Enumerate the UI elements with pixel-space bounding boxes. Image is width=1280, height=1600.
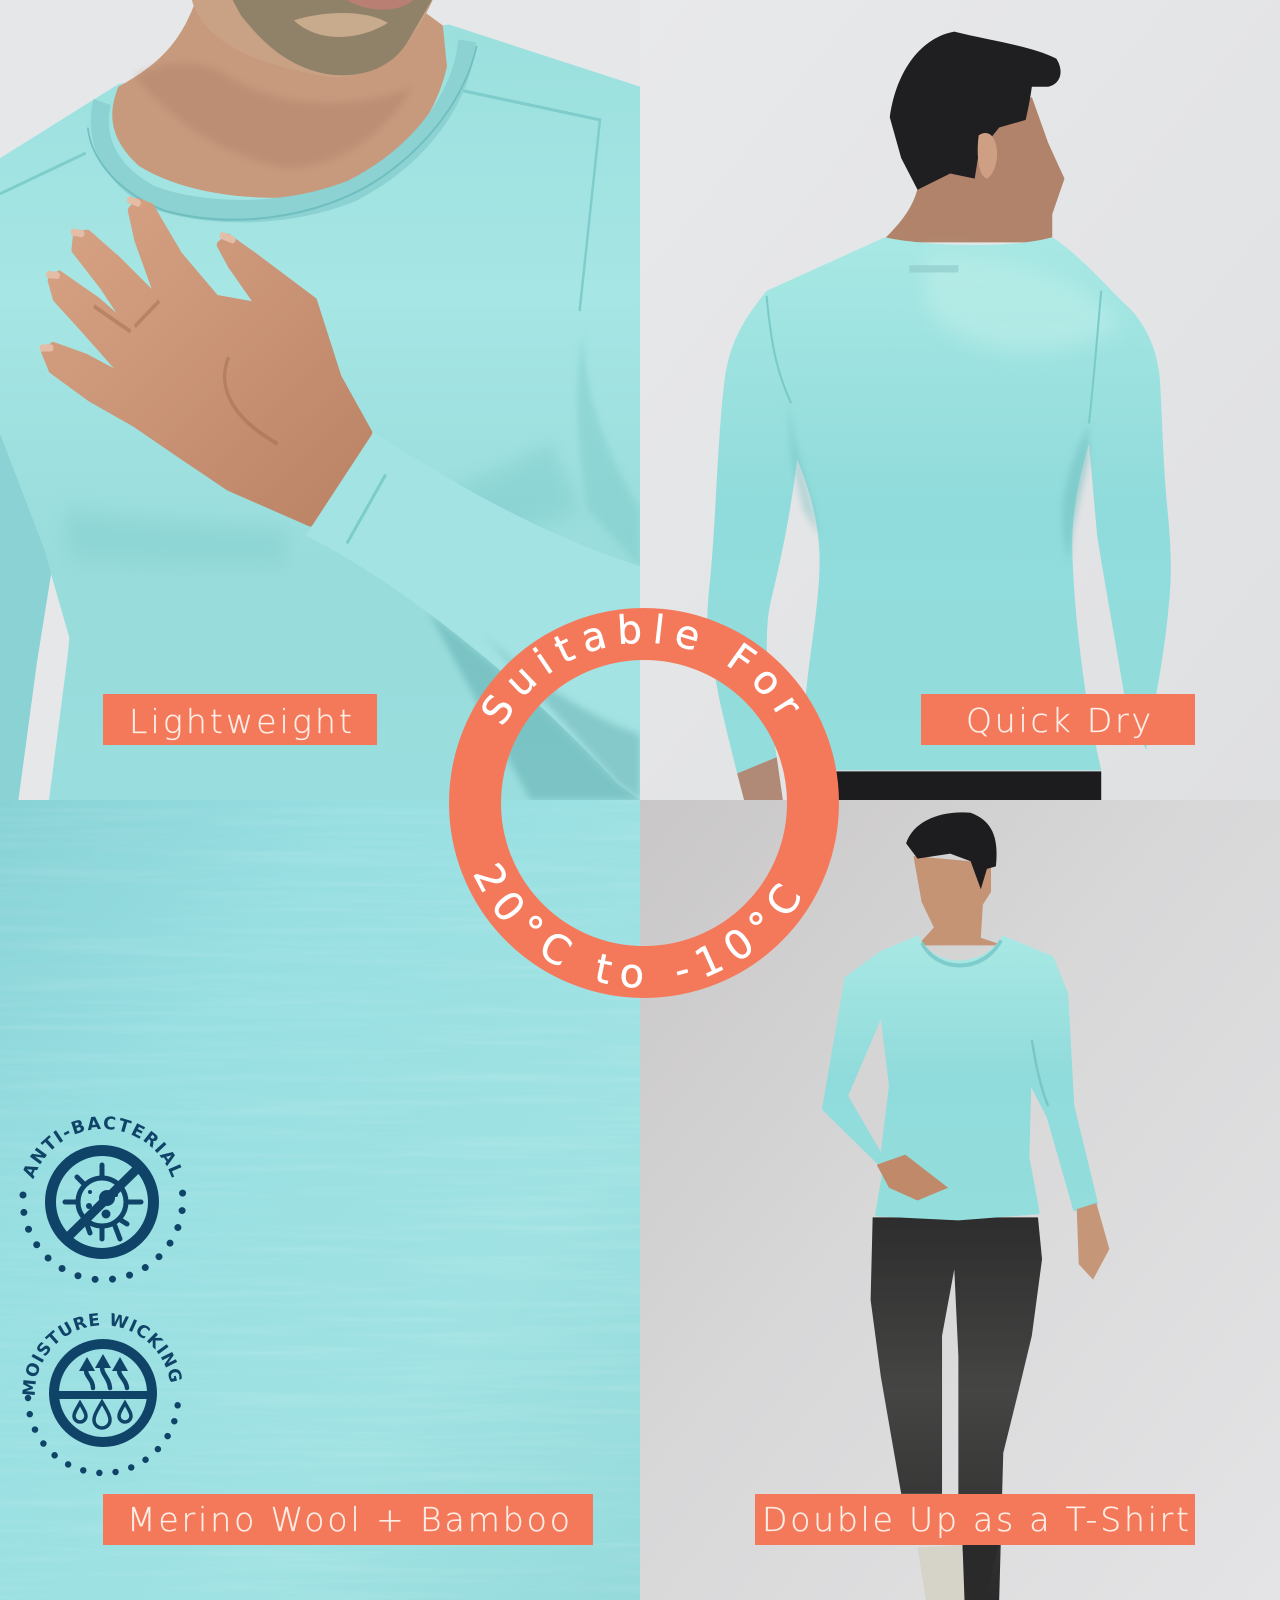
beard and lips bbox=[233, 0, 432, 75]
label: Double Up as a T-Shirt: Double Up as a T-Shirt bbox=[762, 1500, 1189, 1539]
face and neck bbox=[913, 856, 1003, 945]
label: Merino Wool + Bamboo bbox=[103, 1494, 593, 1545]
ring bbox=[54, 1344, 152, 1442]
badge text: MOISTURE WICKING bbox=[22, 1312, 182, 1395]
label: Quick Dry: Quick Dry bbox=[966, 701, 1151, 740]
jeans waistband bbox=[836, 771, 1101, 800]
dotted arc bbox=[23, 1188, 183, 1280]
label: Quick Dry bbox=[921, 694, 1195, 745]
collar band bbox=[100, 41, 467, 211]
panel: back view photo bbox=[707, 32, 1171, 800]
ring text: Suitable For: Suitable For bbox=[482, 613, 800, 725]
lower leg bbox=[962, 1546, 966, 1600]
forearm shadow bbox=[429, 612, 640, 800]
shirt front bbox=[0, 24, 640, 800]
hair bbox=[890, 32, 1061, 190]
prohibition circle bbox=[50, 1150, 154, 1254]
label: Lightweight: Lightweight bbox=[129, 702, 352, 741]
icon: anti-bacterial badge bbox=[20, 1116, 186, 1283]
divider bar bbox=[55, 1391, 151, 1399]
dotted arc bbox=[28, 1398, 178, 1473]
panel: chest close-up photo bbox=[0, 0, 640, 800]
neck bbox=[112, 0, 447, 198]
other hand bbox=[1077, 1203, 1109, 1280]
jeans bbox=[871, 1217, 1042, 1600]
forearm sleeve bbox=[306, 473, 640, 800]
shoe bbox=[918, 1545, 964, 1600]
label: Lightweight bbox=[103, 694, 377, 745]
left hand bbox=[737, 757, 783, 800]
shirt front bbox=[824, 938, 1096, 1218]
hand bbox=[44, 202, 369, 523]
panel: full body front photo bbox=[640, 800, 1280, 1600]
label: Merino Wool + Bamboo: Merino Wool + Bamboo bbox=[127, 1500, 570, 1539]
ear bbox=[978, 133, 997, 179]
slash bbox=[68, 1168, 138, 1237]
water drops bbox=[74, 1402, 131, 1428]
hair bbox=[906, 812, 997, 889]
wicking arrows bbox=[86, 1362, 127, 1388]
ring text: temperature range: 20°C to -10°C bbox=[474, 862, 800, 988]
badge text: ANTI-BACTERIAL bbox=[24, 1116, 182, 1180]
virus bbox=[65, 1165, 141, 1239]
front hand bbox=[877, 1155, 948, 1201]
shirt back bbox=[707, 237, 1171, 773]
neck and head skin bbox=[881, 97, 1064, 242]
badge: temperature ring bbox=[449, 608, 839, 998]
icon: moisture wicking badge bbox=[22, 1312, 182, 1476]
gap between arm and torso bbox=[848, 1019, 889, 1152]
panel: fabric texture close-up bbox=[0, 800, 640, 1600]
